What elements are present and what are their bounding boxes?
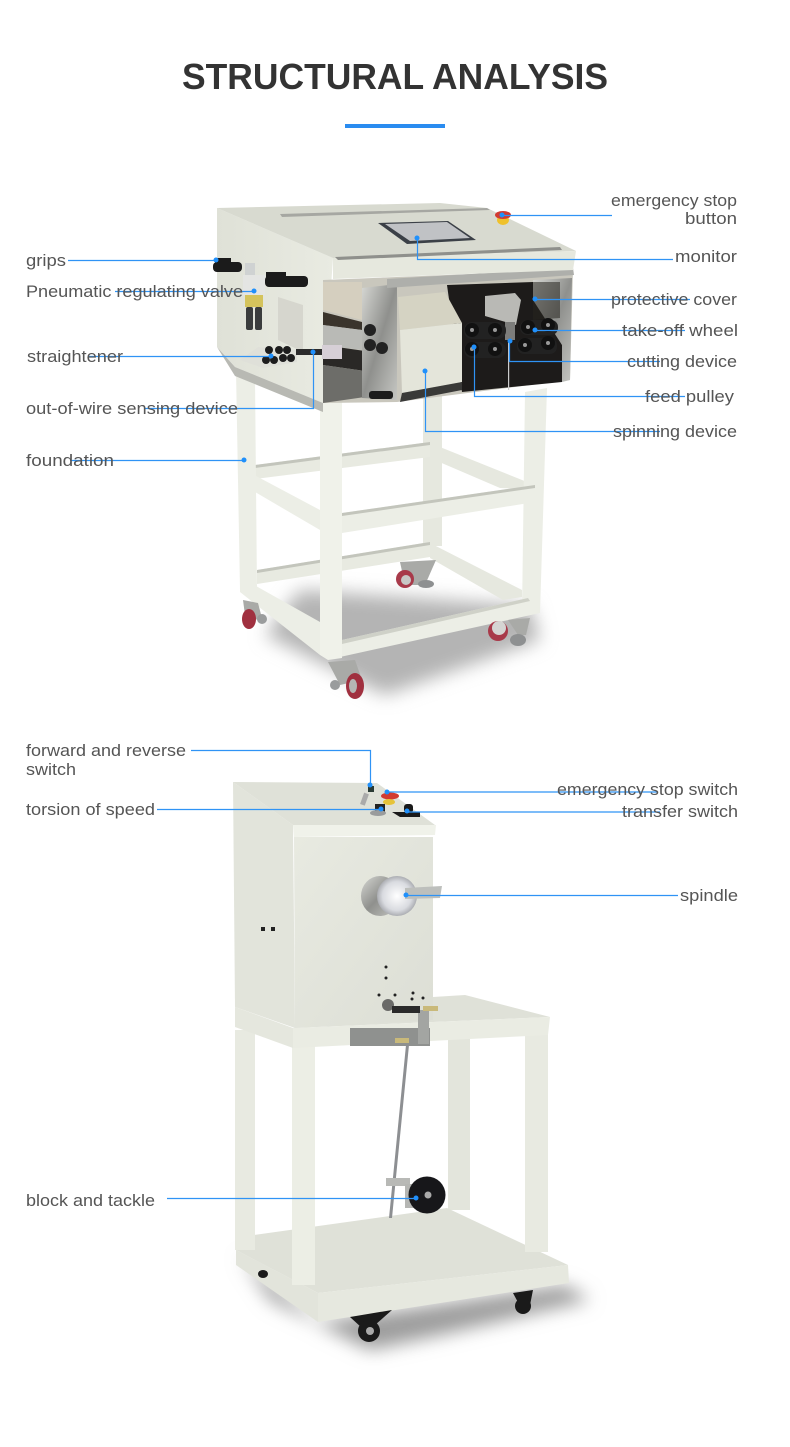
rollers [464,318,558,358]
label block: block and tackle [26,1191,155,1210]
label forward reverse [26,741,186,779]
emergency stop [497,215,509,225]
label emergency stop button: button [685,209,737,228]
casters [242,560,530,699]
monitor [378,221,476,244]
lid front [333,251,576,279]
label forward reverse: switch [26,760,76,779]
emergency button line [500,212,612,218]
cutting block [485,293,521,325]
label transfer: transfer switch [622,802,738,821]
title underline [345,124,445,128]
legs [235,1030,255,1250]
back legs [448,1035,470,1210]
black panel [447,282,563,392]
block line [167,1196,418,1200]
top controls [360,786,420,817]
straightener [240,345,342,368]
cabinet [233,782,436,1028]
pulley line [472,344,685,396]
spindle [361,876,442,916]
silver cover [533,278,572,382]
wheel line [532,328,685,332]
foundation line [70,458,246,462]
grips line [68,258,218,262]
torsion line [157,806,384,812]
callouts upper [68,212,690,462]
casters [258,1270,533,1342]
lid top [217,203,576,258]
label sensing: out-of-wire sensing device [26,399,238,418]
lower bracket [350,966,438,1046]
label emergency stop button: emergency stop [611,191,737,210]
side holes [261,927,275,931]
handles [213,258,308,287]
label emergency stop button [611,191,737,228]
spinning cover box [398,292,462,402]
upper table [235,995,550,1048]
label spindle: spindle [680,886,738,905]
machine interior [323,270,573,403]
machine left side [217,208,333,403]
label monitor: monitor [675,247,737,266]
floor shadow [240,1255,590,1350]
spinning line [422,368,660,432]
valve line [115,288,256,294]
cover line [532,296,690,302]
rod [389,1045,409,1218]
transfer line [404,808,660,814]
stand [236,370,547,660]
silver top bar [387,268,574,288]
straightener line [88,354,274,358]
label forward reverse: forward and reverse [26,741,186,760]
lower tray [236,1208,569,1322]
label grips: grips [26,251,66,270]
air filter [243,263,265,330]
clamp [386,1178,410,1186]
label cutting: cutting device [627,352,737,371]
label valve: Pneumatic regulating valve [26,282,243,301]
label cover: protective cover [611,290,737,309]
forward reverse line [191,750,372,788]
fan grille [278,297,303,352]
label torsion: torsion of speed [26,800,155,819]
front bracket [362,284,397,400]
title: STRUCTURAL ANALYSIS [182,56,608,97]
callouts lower [157,750,678,1200]
label straightener: straightener [27,347,123,366]
cutting line [508,338,660,362]
labels upper [26,191,738,470]
machine: wire stripping unit on stand [213,203,576,699]
label emergency switch: emergency stop switch [557,780,738,799]
label spinning: spinning device [613,422,737,441]
pulley wheel [405,1176,446,1214]
sensing line [145,350,316,408]
floor shadow [265,590,540,695]
monitor line [414,236,673,260]
labels lower [26,741,738,1210]
label wheel: take-off wheel [622,321,738,340]
emergency switch line [384,790,657,794]
spindle line [404,892,678,898]
machine: wire spool cabinet [233,782,590,1350]
label pulley: feed pulley [645,387,735,406]
label foundation: foundation [26,451,114,470]
